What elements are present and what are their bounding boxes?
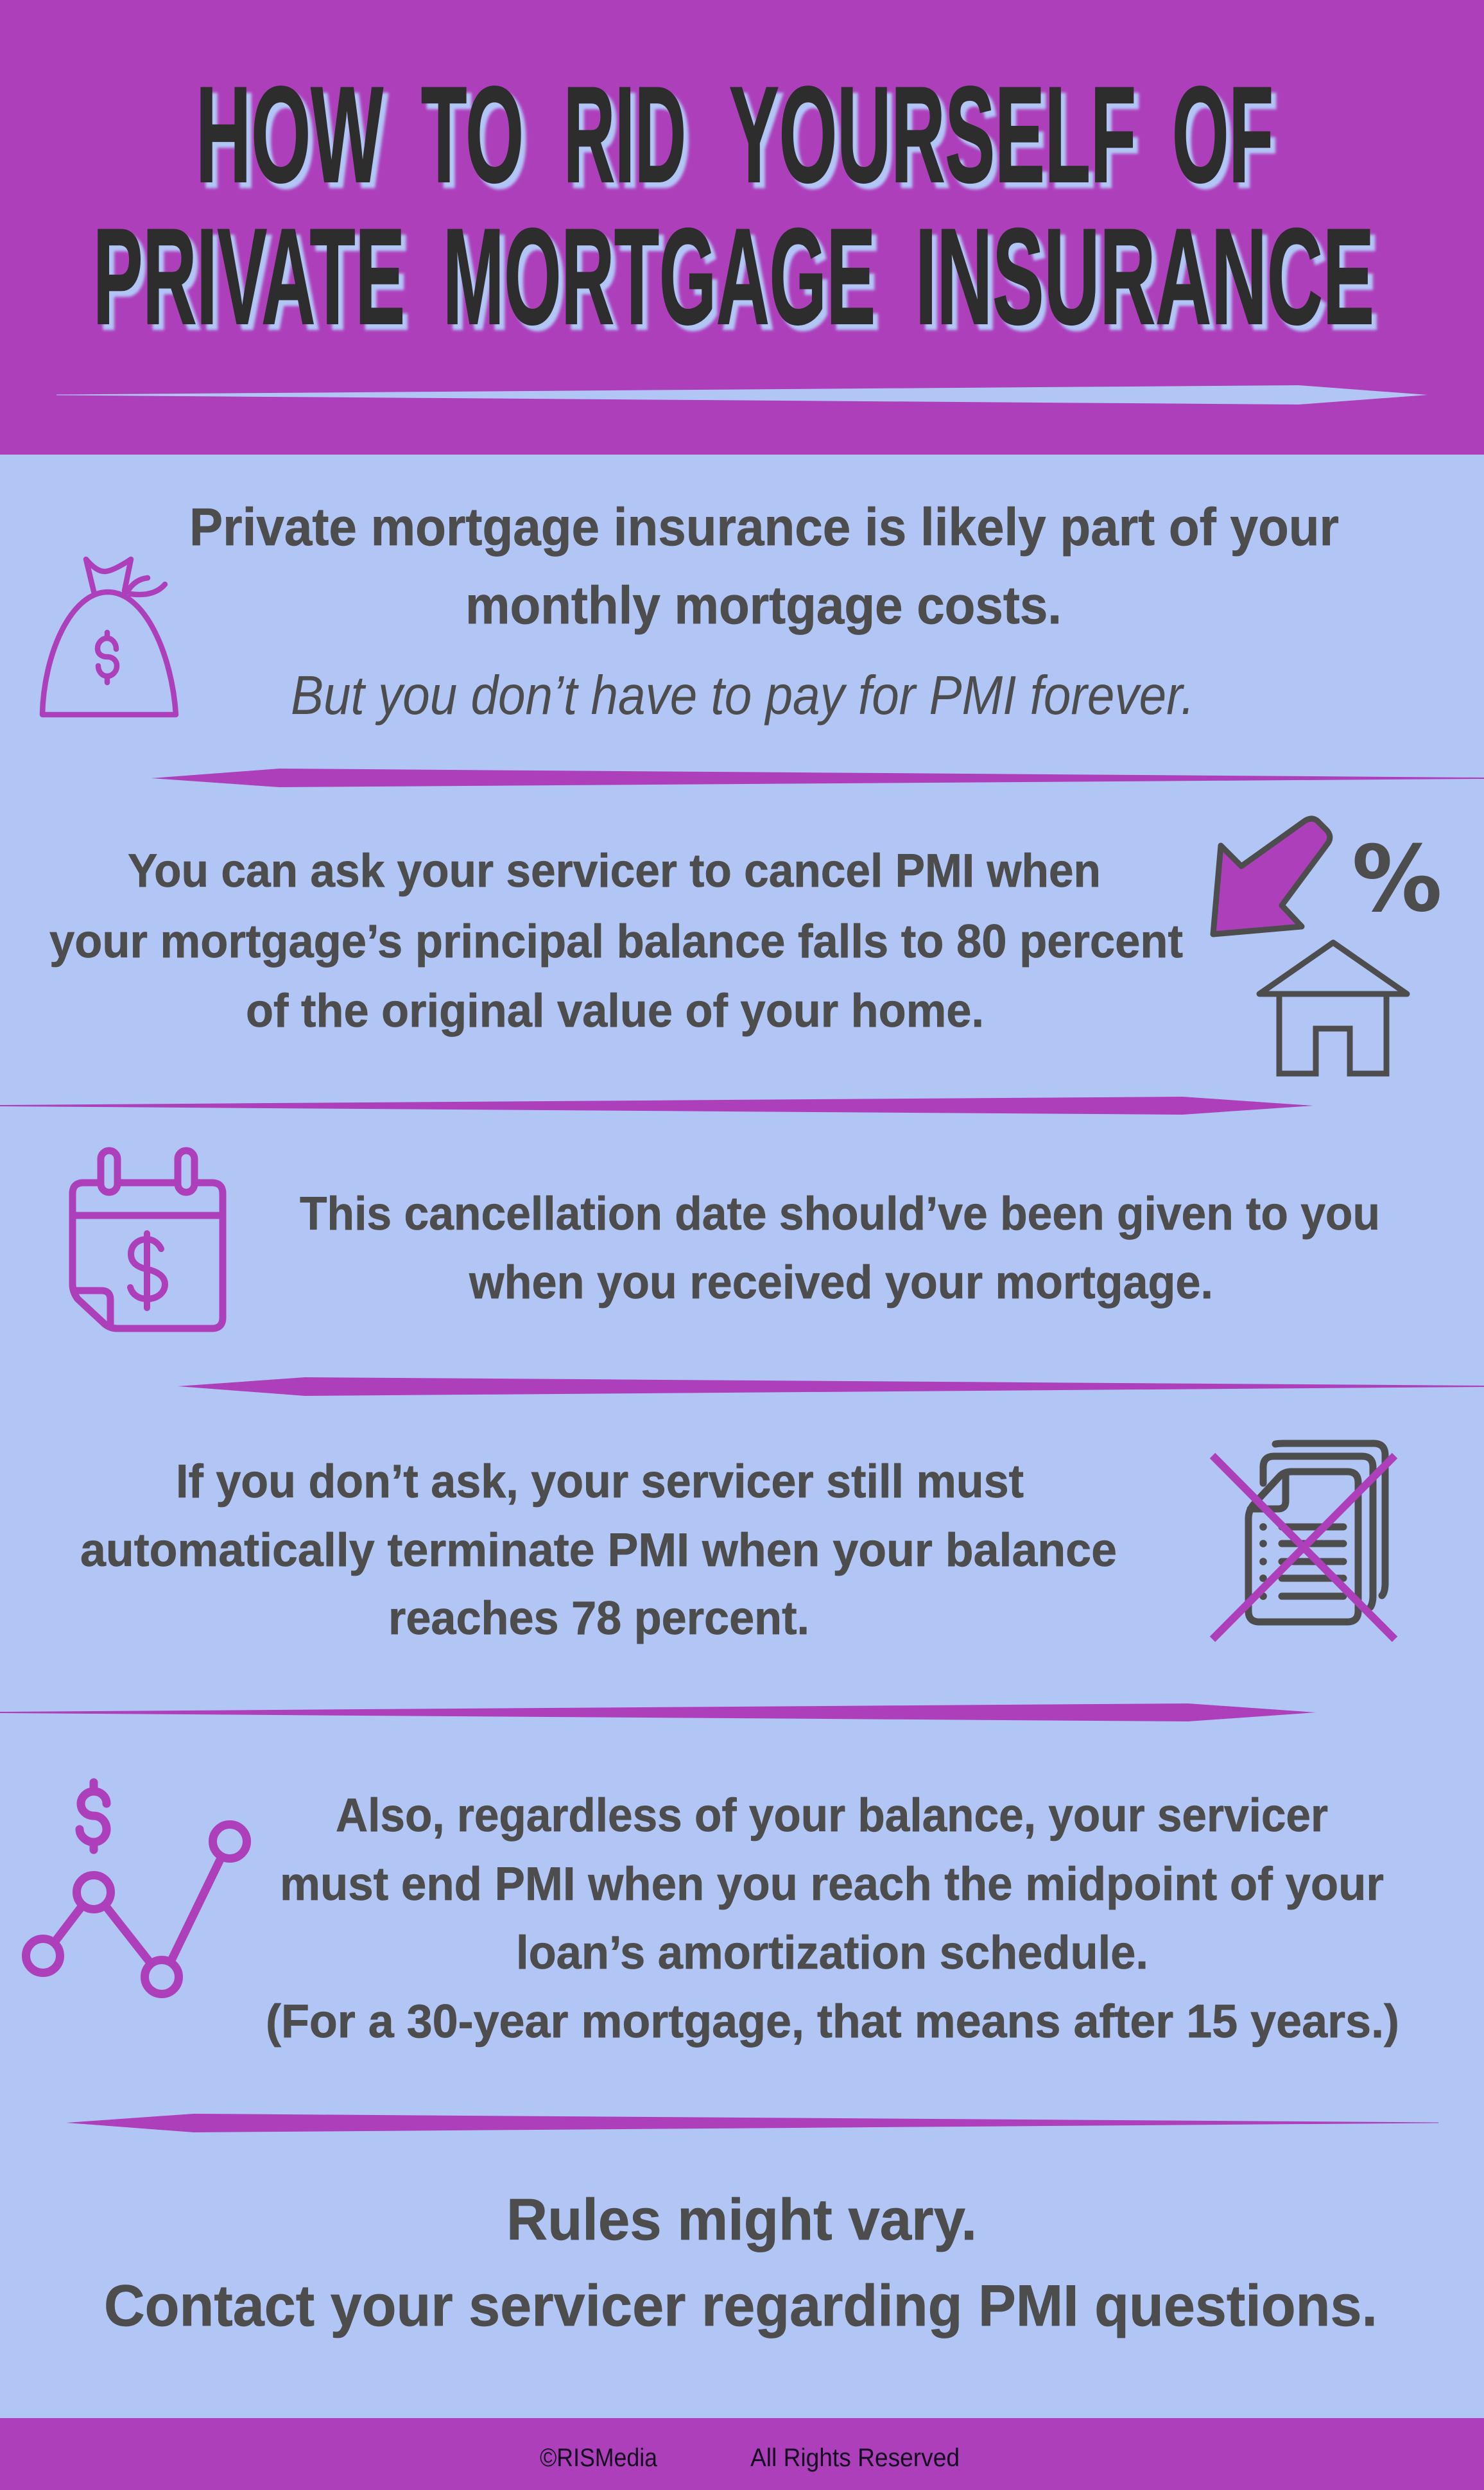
- icon: calendar with dollar: [73, 1151, 223, 1328]
- header panel: [0, 0, 1484, 455]
- title: TO: [421, 58, 524, 211]
- title: YOURSELF: [729, 58, 1136, 211]
- midpoint text: [266, 1789, 1399, 2048]
- closing note: Contact your servicer regarding PMI questions.: [104, 2274, 1377, 2338]
- divider 5: [66, 2114, 1438, 2132]
- icon: line chart with dollar: [26, 1782, 246, 1994]
- midpoint text: Also, regardless of your balance, your servicer: [336, 1789, 1328, 1841]
- title: [93, 58, 1374, 353]
- cancel text: [49, 845, 1183, 1037]
- divider 1: [151, 769, 1484, 787]
- title: PRIVATE: [93, 200, 405, 353]
- icon: money bag: [42, 559, 176, 715]
- divider 3: [178, 1377, 1484, 1396]
- midpoint text: (For a 30-year mortgage, that means after 15 years.): [266, 1996, 1399, 2048]
- title: MORTGAGE: [443, 200, 876, 353]
- midpoint text: must end PMI when you reach the midpoint of your: [280, 1858, 1384, 1910]
- cancel text: You can ask your servicer to cancel PMI when: [128, 845, 1101, 897]
- termination text: automatically terminate PMI when your balance: [80, 1524, 1117, 1576]
- header divider: [56, 385, 1428, 405]
- cancel text: your mortgage’s principal balance falls to 80 percent: [49, 916, 1183, 968]
- termination text: [80, 1456, 1117, 1644]
- intro text: [189, 497, 1339, 726]
- title: RID: [564, 58, 686, 211]
- cancellation text: when you received your mortgage.: [469, 1257, 1213, 1309]
- panel: cancellation date: [73, 1151, 1380, 1328]
- divider 2: [0, 1097, 1313, 1115]
- icon: down arrow: [1213, 819, 1330, 934]
- panel: intro: [42, 497, 1339, 726]
- cancellation text: [300, 1188, 1380, 1309]
- panel: cancel at 80 percent: [49, 819, 1442, 1074]
- termination text: reaches 78 percent.: [388, 1592, 809, 1644]
- rights reserved: All Rights Reserved: [750, 2444, 960, 2472]
- intro text: monthly mortgage costs.: [465, 575, 1062, 635]
- icon: crossed out documents: [1212, 1443, 1395, 1639]
- icon: house: [1259, 943, 1407, 1074]
- intro text: But you don’t have to pay for PMI forever.: [291, 665, 1195, 726]
- termination text: If you don’t ask, your servicer still must: [176, 1456, 1024, 1508]
- cancel text: of the original value of your home.: [246, 985, 984, 1037]
- intro text: Private mortgage insurance is likely part of your: [189, 497, 1339, 557]
- title: HOW: [196, 58, 383, 211]
- panel: automatic termination: [80, 1443, 1395, 1644]
- copyright: ©RISMedia: [540, 2444, 658, 2472]
- divider 4: [0, 1703, 1316, 1721]
- panel: midpoint rule: [26, 1782, 1399, 2048]
- midpoint text: loan’s amortization schedule.: [516, 1927, 1148, 1979]
- icon: down arrow, percent sign and house: [1213, 819, 1442, 1074]
- footer band: [0, 2418, 1484, 2490]
- closing note: Rules might vary.: [506, 2188, 977, 2252]
- percent sign: %: [1352, 826, 1442, 932]
- closing note: [104, 2188, 1377, 2338]
- cancellation text: This cancellation date should’ve been given to you: [300, 1188, 1380, 1240]
- title: OF: [1172, 58, 1273, 211]
